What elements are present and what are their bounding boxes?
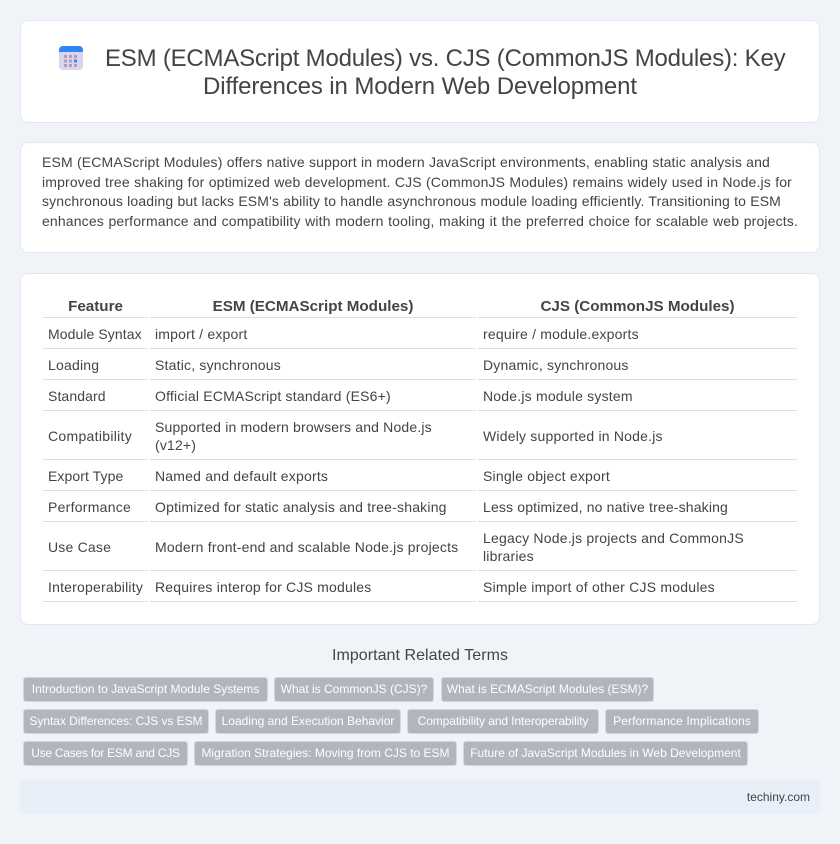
table rows: Use Case [48,539,111,555]
related terms tags: Loading and Execution Behavior [222,714,394,728]
intro text [42,154,798,229]
table rows: Official ECMAScript standard (ES6+) [155,388,391,404]
table rows: Supported in modern browsers and Node.js [155,419,432,435]
related terms tags: Syntax Differences: CJS vs ESM [29,714,202,728]
table rows: import / export [155,326,247,342]
table rows: Simple import of other CJS modules [483,579,715,595]
related terms tags: Introduction to JavaScript Module Systems [32,682,259,696]
intro text: enhances performance and compatibility with modern tooling, making it the preferred choice for scalable web projects. [42,213,798,229]
icon: calendar [59,46,83,70]
footer bar [20,780,820,814]
title card [20,20,820,123]
table rows: Dynamic, synchronous [483,357,629,373]
related terms tags: What is ECMAScript Modules (ESM)? [447,682,648,696]
table header: Feature [68,298,123,315]
table rows: (v12+) [155,437,196,453]
related terms tags: Future of JavaScript Modules in Web Development [470,746,741,760]
panel: comparison table [20,273,820,625]
table rows: Compatibility [48,428,132,444]
related terms heading: Important Related Terms [332,647,508,664]
table rows: Performance [48,499,131,515]
table rows: Standard [48,388,106,404]
title: ESM (ECMAScript Modules) vs. CJS (CommonJS Modules): Key [105,45,785,72]
table rows: Optimized for static analysis and tree-shaking [155,499,447,515]
intro text: ESM (ECMAScript Modules) offers native support in modern JavaScript environments, enabling static analysis and [42,154,770,170]
related terms tags: Compatibility and Interoperability [418,714,588,728]
table rows: Legacy Node.js projects and CommonJS [483,530,744,546]
related terms tags: Migration Strategies: Moving from CJS to ESM [201,746,450,760]
table rows: Less optimized, no native tree-shaking [483,499,728,515]
table rows: Export Type [48,468,123,484]
table rows: Requires interop for CJS modules [155,579,372,595]
table header: CJS (CommonJS Modules) [540,298,735,315]
related terms tags: Use Cases for ESM and CJS [31,746,180,760]
table rows: libraries [483,548,534,564]
panel: intro [20,142,820,253]
table rows [43,317,797,602]
title: Differences in Modern Web Development [203,73,637,100]
related terms tags [23,677,759,766]
table rows: Loading [48,357,99,373]
table rows: Named and default exports [155,468,328,484]
table rows: Single object export [483,468,610,484]
table rows: Modern front-end and scalable Node.js projects [155,539,458,555]
intro text: synchronous loading but lacks ESM's ability to handle asynchronous module loading efficiently. Transitioning to ESM [42,193,781,209]
table rows: Node.js module system [483,388,633,404]
related terms tags: What is CommonJS (CJS)? [281,682,427,696]
table rows: Widely supported in Node.js [483,428,663,444]
table header: ESM (ECMAScript Modules) [213,298,413,315]
table header [68,298,735,315]
title [105,45,786,100]
footer credit: techiny.com [747,790,810,804]
table rows: Module Syntax [48,326,142,342]
table rows: Interoperability [48,579,143,595]
intro text: improved tree shaking for optimized web development. CJS (CommonJS Modules) remains widely used in Node.js for [42,174,792,190]
table rows: require / module.exports [483,326,639,342]
table rows: Static, synchronous [155,357,281,373]
related terms tags: Performance Implications [613,714,751,728]
